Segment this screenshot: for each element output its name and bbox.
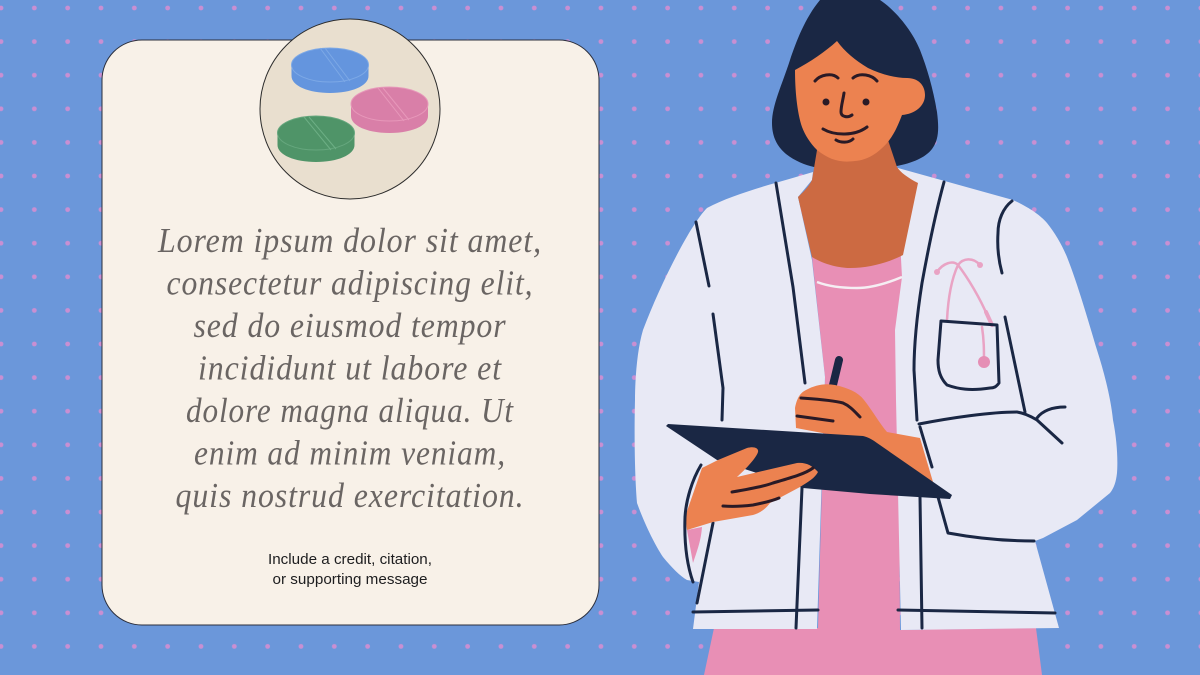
icon: blue pill xyxy=(292,48,368,93)
panel: quote card xyxy=(102,19,599,625)
coat lines xyxy=(693,182,1065,628)
hair xyxy=(772,0,938,167)
credit text: or supporting message xyxy=(272,571,428,588)
coat pocket xyxy=(938,321,999,389)
quote text: dolore magna aliqua. Ut xyxy=(186,391,514,430)
credit text xyxy=(268,551,432,588)
quote text: Lorem ipsum dolor sit amet, xyxy=(157,221,542,260)
icon: pink pill xyxy=(351,87,428,133)
neck xyxy=(798,140,918,268)
coat right xyxy=(890,168,1117,630)
quote text: quis nostrud exercitation. xyxy=(176,476,524,515)
sleeve cuff xyxy=(685,465,701,582)
icon: stethoscope xyxy=(934,259,992,368)
icon: pills in circle xyxy=(260,19,440,199)
pen xyxy=(833,360,839,385)
illustration: doctor xyxy=(635,0,1117,675)
clipboard xyxy=(666,424,952,499)
dress xyxy=(704,252,1042,675)
face xyxy=(795,41,925,162)
credit text: Include a credit, citation, xyxy=(268,551,432,568)
quote text: enim ad minim veniam, xyxy=(194,434,506,472)
icon: green pill xyxy=(278,116,354,162)
facial features xyxy=(815,75,877,142)
quote text xyxy=(157,221,542,515)
necklace xyxy=(817,277,902,288)
upper hand xyxy=(795,384,933,482)
quote text: consectetur adipiscing elit, xyxy=(166,264,534,302)
quote text: sed do eiusmod tempor xyxy=(194,306,506,345)
quote text: incididunt ut labore et xyxy=(198,348,502,388)
coat left xyxy=(635,172,825,629)
sleeve lining xyxy=(687,527,702,563)
lower hand xyxy=(685,447,818,530)
